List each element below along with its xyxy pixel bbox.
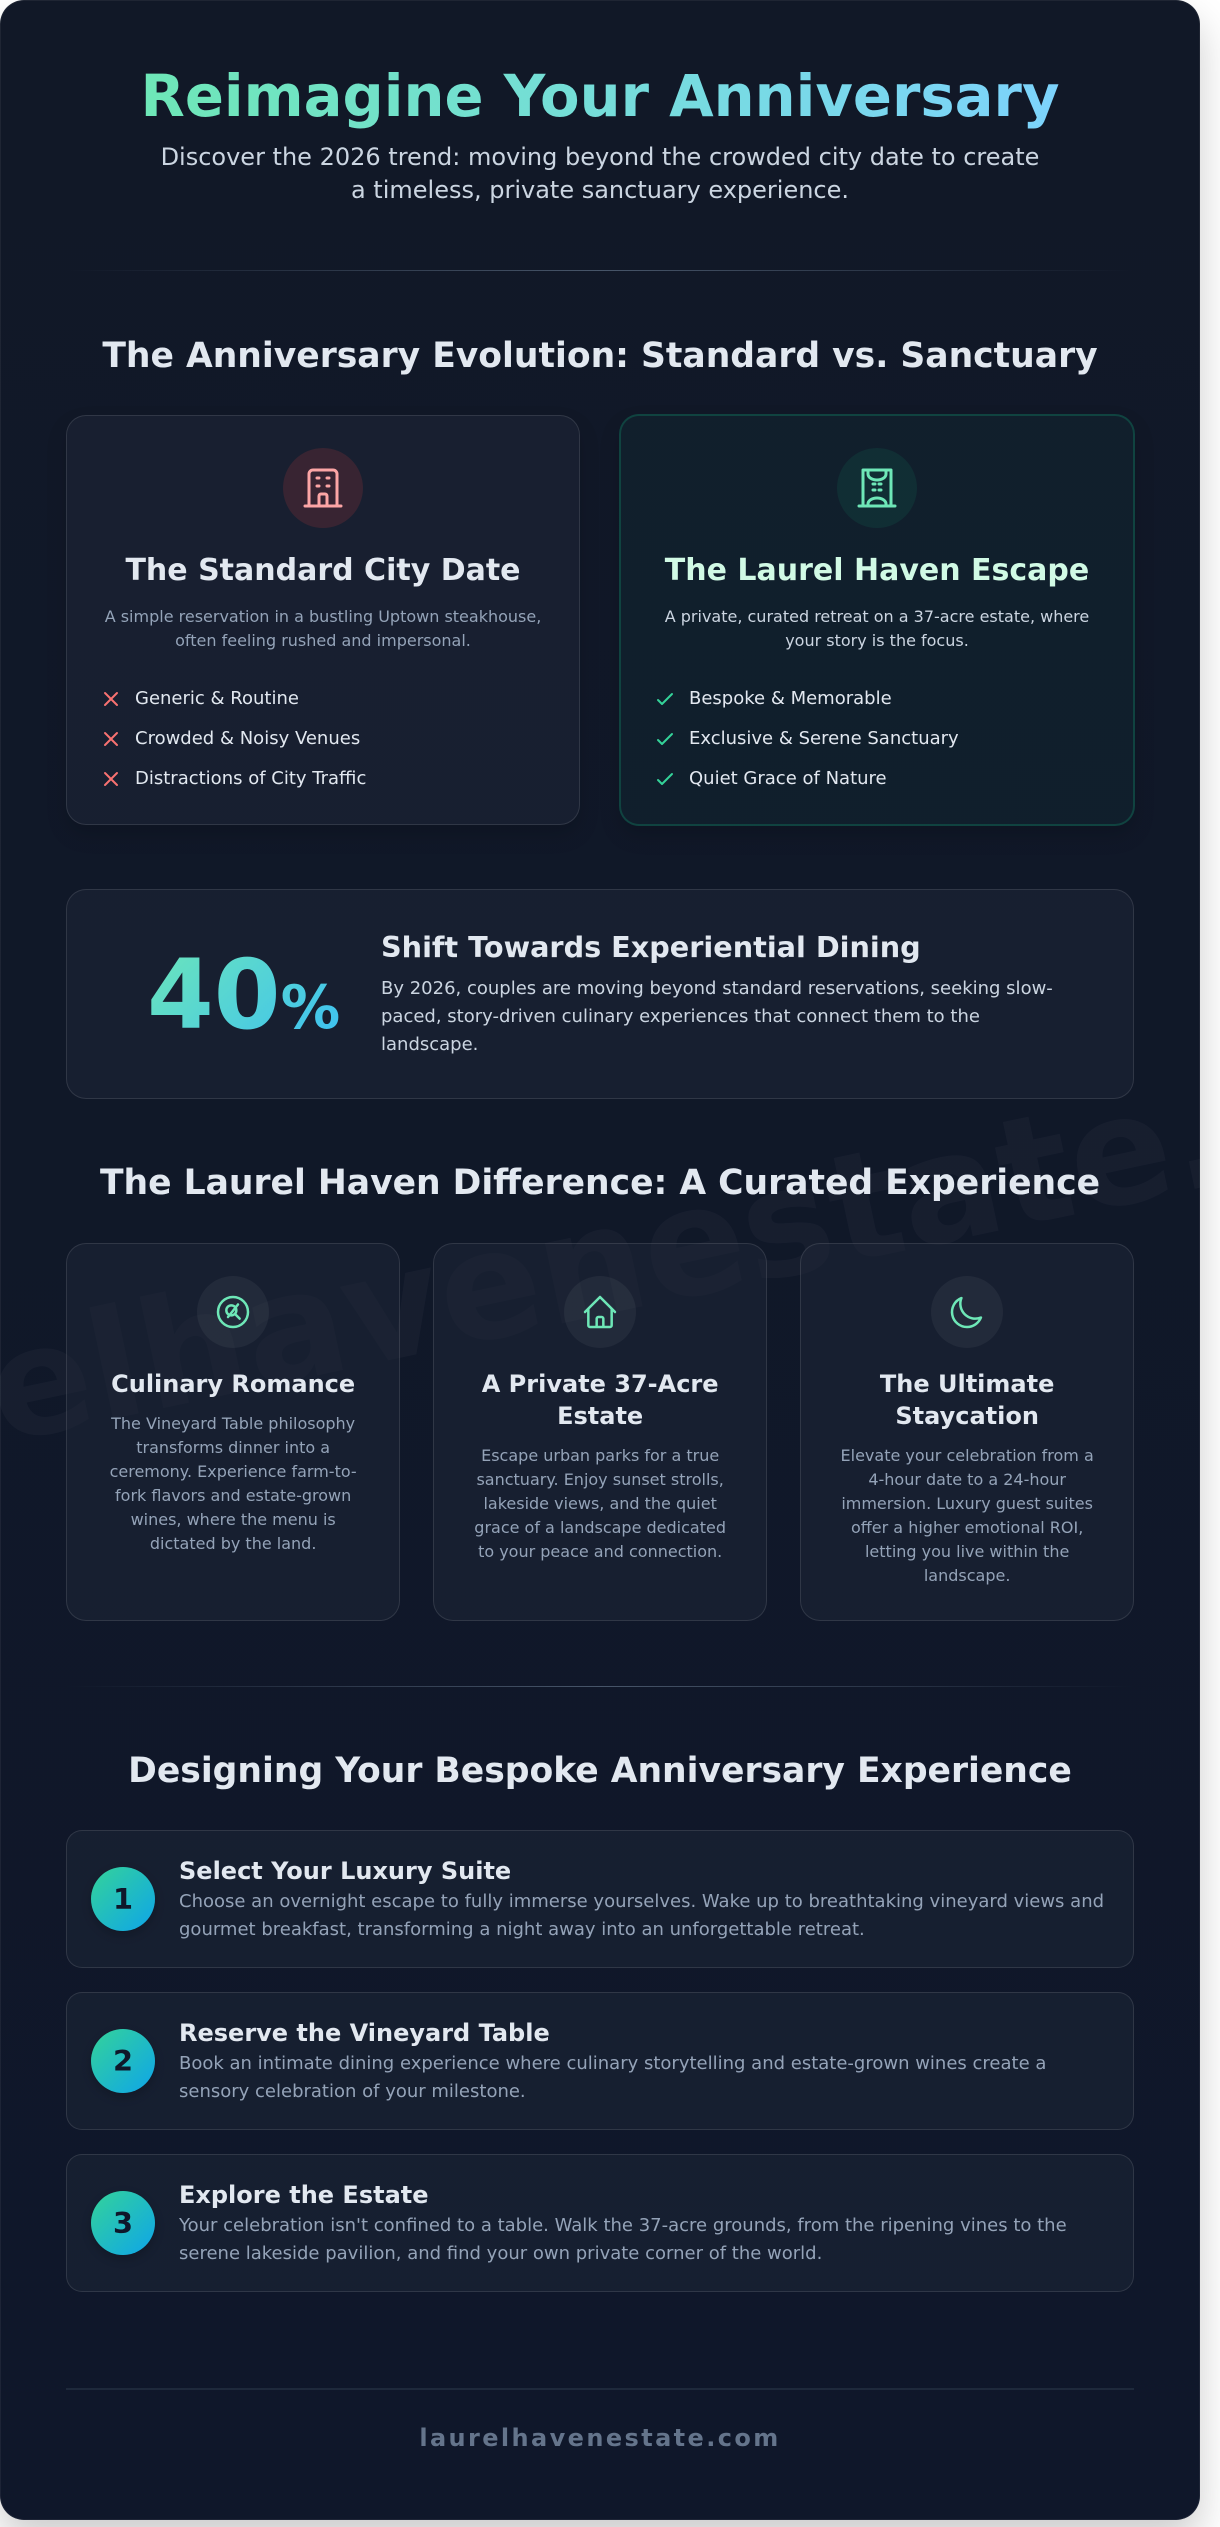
card text: The Vineyard Table philosophy	[111, 1414, 355, 1433]
card text: dictated by the land.	[150, 1534, 316, 1553]
step text: Book an intimate dining experience where culinary storytelling and estate-grown wines create a	[179, 2053, 1046, 2074]
card title: Staycation	[895, 1402, 1039, 1430]
card text: immersion. Luxury guest suites	[841, 1494, 1093, 1513]
card description: your story is the focus.	[785, 631, 969, 650]
stat text: landscape.	[381, 1034, 478, 1055]
stat text: By 2026, couples are moving beyond standard reservations, seeking slow-	[381, 978, 1053, 999]
card title: The Standard City Date	[125, 553, 521, 588]
subtitle	[161, 143, 1039, 204]
step 2	[66, 1992, 1134, 2130]
list item: Crowded & Noisy Venues	[135, 728, 360, 749]
card text	[474, 1446, 726, 1561]
list item: Generic & Routine	[135, 688, 299, 709]
step text: gourmet breakfast, transforming a night away into an unforgettable retreat.	[179, 1919, 865, 1940]
card description: A private, curated retreat on a 37-acre estate, where	[665, 607, 1089, 626]
number badge	[91, 2191, 155, 2255]
list item: Distractions of City Traffic	[135, 768, 366, 789]
heading: evolution: The Anniversary Evolution: Standard vs. Sanctuary	[102, 336, 1098, 376]
icon: city building	[283, 448, 363, 528]
number badge: 1	[113, 1882, 133, 1916]
card text: wines, where the menu is	[131, 1510, 336, 1529]
card text: fork flavors and estate-grown	[115, 1486, 351, 1505]
card description: often feeling rushed and impersonal.	[175, 631, 471, 650]
card text: letting you live within the	[865, 1542, 1069, 1561]
list item: Quiet Grace of Nature	[689, 768, 887, 789]
step title: Select Your Luxury Suite	[179, 1857, 511, 1885]
stat number: 40%	[147, 939, 340, 1051]
panel: culinary romance	[66, 1243, 400, 1621]
card description	[105, 607, 541, 650]
subtitle: Discover the 2026 trend: moving beyond the crowded city date to create	[161, 143, 1039, 171]
number badge: 3	[113, 2206, 133, 2240]
card text: landscape.	[924, 1566, 1010, 1585]
title: Reimagine Your Anniversary	[141, 63, 1059, 130]
card title	[482, 1370, 719, 1430]
card text: 4-hour date to a 24-hour	[868, 1470, 1066, 1489]
card title	[880, 1370, 1054, 1430]
card description	[664, 607, 1089, 650]
card title: Culinary Romance	[111, 1370, 355, 1398]
card text: transforms dinner into a	[136, 1438, 330, 1457]
card text	[841, 1446, 1094, 1585]
card title: The Ultimate	[880, 1370, 1054, 1398]
icon: moon	[931, 1276, 1003, 1348]
icon: estate building	[837, 448, 917, 528]
step text	[179, 2215, 1067, 2264]
step 1	[66, 1830, 1134, 1968]
card text: grace of a landscape dedicated	[474, 1518, 726, 1537]
stat heading: Shift Towards Experiential Dining	[381, 930, 921, 964]
step text: sensory celebration of your milestone.	[179, 2081, 526, 2102]
card title: The Laurel Haven Escape	[665, 553, 1089, 588]
number badge	[91, 2029, 155, 2093]
number badge	[91, 1867, 155, 1931]
panel: 40% statistic	[66, 889, 1134, 1099]
card title: Estate	[557, 1402, 643, 1430]
stat text	[381, 978, 1053, 1055]
step text	[179, 2053, 1046, 2102]
card text: offer a higher emotional ROI,	[851, 1518, 1083, 1537]
icon: house	[564, 1276, 636, 1348]
card text: lakeside views, and the quiet	[483, 1494, 717, 1513]
card text: sanctuary. Enjoy sunset strolls,	[476, 1470, 724, 1489]
panel: private estate	[433, 1243, 767, 1621]
panel: standard city date	[66, 415, 580, 825]
heading: difference: The Laurel Haven Difference: A Curated Experience	[100, 1163, 1100, 1203]
card text: Elevate your celebration from a	[841, 1446, 1094, 1465]
step text: Choose an overnight escape to fully immerse yourselves. Wake up to breathtaking vineyard views and	[179, 1891, 1104, 1912]
card description: A simple reservation in a bustling Uptown steakhouse,	[105, 607, 541, 626]
card text: to your peace and connection.	[478, 1542, 722, 1561]
heading: designing: Designing Your Bespoke Anniversary Experience	[128, 1751, 1072, 1791]
card text	[110, 1414, 357, 1553]
stat text: paced, story-driven culinary experiences that connect them to the	[381, 1006, 980, 1027]
card text: ceremony. Experience farm-to-	[110, 1462, 357, 1481]
footer url: laurelhavenestate.com	[419, 2424, 781, 2452]
step text	[179, 1891, 1104, 1940]
step 3	[66, 2154, 1134, 2292]
step text: Your celebration isn't confined to a table. Walk the 37-acre grounds, from the ripening vines to the	[179, 2215, 1067, 2236]
subtitle: a timeless, private sanctuary experience.	[351, 176, 849, 204]
step title: Reserve the Vineyard Table	[179, 2019, 550, 2047]
card text: Escape urban parks for a true	[481, 1446, 719, 1465]
card title: A Private 37-Acre	[482, 1370, 719, 1398]
list item: Exclusive & Serene Sanctuary	[689, 728, 959, 749]
panel: laurel haven escape	[619, 414, 1135, 826]
icon: culinary	[197, 1276, 269, 1348]
number badge: 2	[113, 2044, 133, 2078]
step text: serene lakeside pavilion, and find your own private corner of the world.	[179, 2243, 822, 2264]
step title: Explore the Estate	[179, 2181, 429, 2209]
panel: ultimate staycation	[800, 1243, 1134, 1621]
list item: Bespoke & Memorable	[689, 688, 892, 709]
